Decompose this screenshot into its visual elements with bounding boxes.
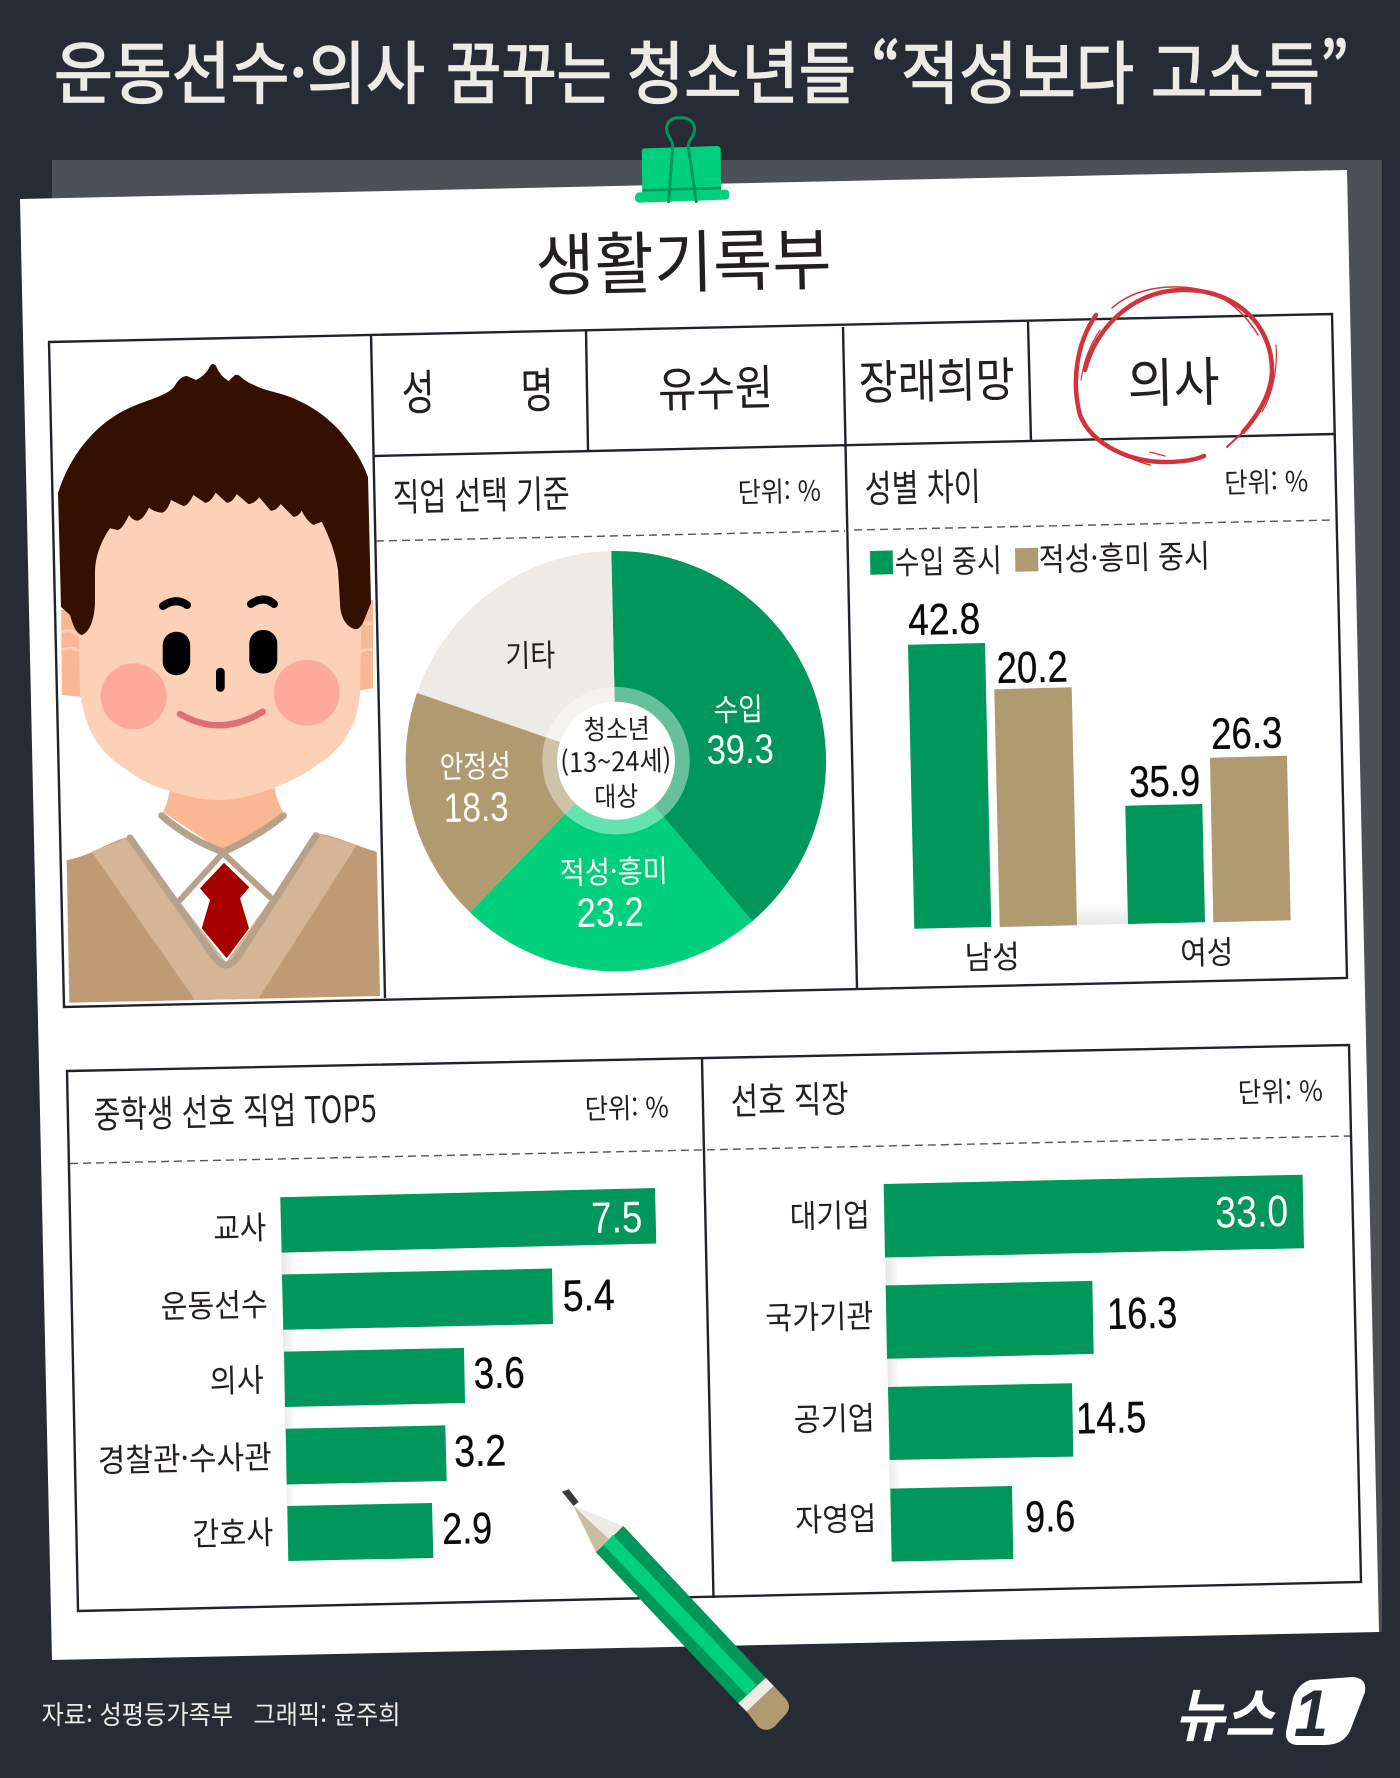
- hair: [58, 364, 371, 635]
- pie label: stability: 안정성: [439, 740, 511, 787]
- title: 청소년들: [627, 19, 856, 118]
- tie: [200, 863, 249, 958]
- pie label: aptitude and interest: [559, 846, 668, 936]
- legend: 수입 중시: [894, 536, 1002, 584]
- value labels: 26.3: [1211, 708, 1283, 759]
- pie label: income: 39.3: [706, 726, 774, 773]
- value labels: 33.0: [1215, 1187, 1289, 1237]
- category labels: 운동선수: [160, 1280, 268, 1328]
- face: [79, 480, 361, 800]
- legend: [870, 531, 1210, 584]
- value labels: [908, 594, 1283, 807]
- collar: [130, 816, 316, 965]
- bar chart: [97, 1188, 656, 1561]
- pie center label: [560, 707, 672, 814]
- source and credit: 자료: 성평등가족부 그래픽: 윤주희: [42, 1695, 400, 1732]
- value labels: 7.5: [591, 1193, 643, 1243]
- eyebrows: [163, 600, 274, 606]
- name label: 성: [401, 353, 435, 424]
- value labels: 16.3: [1107, 1288, 1178, 1339]
- future hope label: 장래희망: [858, 341, 1015, 413]
- value labels: 42.8: [908, 594, 981, 645]
- panel heading: 중학생 선호 직업 TOP5: [93, 1079, 377, 1139]
- upper record table: [49, 314, 1347, 1007]
- value labels: 3.2: [454, 1426, 507, 1476]
- value labels: [1025, 1187, 1289, 1542]
- pie center label: 대상: [594, 775, 639, 814]
- panel heading: 선호 직장: [730, 1069, 849, 1125]
- bar chart: [765, 1175, 1304, 1562]
- category labels: 교사: [213, 1203, 267, 1250]
- logo: News1: 1: [1294, 1676, 1328, 1750]
- name label: 명: [520, 351, 554, 422]
- value labels: 2.9: [442, 1504, 493, 1554]
- value labels: 5.4: [562, 1271, 615, 1321]
- value labels: 14.5: [1076, 1393, 1147, 1443]
- unit label: 단위: %: [584, 1086, 669, 1128]
- shirt: [130, 810, 316, 962]
- lower table: [67, 1045, 1361, 1611]
- pie label: aptitude and interest: 적성·흥미: [559, 846, 668, 893]
- pie center label: 청소년: [583, 707, 650, 747]
- title: [54, 19, 1349, 118]
- category labels: 자영업: [795, 1494, 877, 1541]
- panel heading: 성별 차이: [864, 456, 981, 513]
- category labels: 공기업: [793, 1393, 875, 1441]
- pie chart: [406, 551, 826, 971]
- mouth: [180, 712, 263, 725]
- ear highlights: [62, 622, 373, 652]
- neck: [163, 785, 284, 852]
- pie label: income: [706, 684, 774, 773]
- category labels: 간호사: [192, 1508, 274, 1555]
- pie label: income: 수입: [713, 684, 763, 730]
- panel: preferred workplace: [730, 1069, 1323, 1562]
- unit label: 단위: %: [1237, 1070, 1323, 1111]
- panel heading: 직업 선택 기준: [392, 463, 570, 522]
- category labels: [964, 927, 1234, 979]
- value labels: 35.9: [1129, 756, 1201, 807]
- value labels: 9.6: [1025, 1492, 1076, 1542]
- title: “적성보다: [871, 19, 1134, 118]
- category labels: [97, 1203, 274, 1555]
- value labels: 3.6: [473, 1348, 525, 1398]
- pie label: aptitude and interest: 23.2: [576, 889, 644, 936]
- pie center label: (13~24세): [560, 739, 672, 780]
- sweater: [67, 833, 380, 1003]
- student portrait: [58, 364, 380, 1003]
- logo: News1: 뉴스: [1175, 1669, 1276, 1753]
- sweater V band: [92, 833, 357, 1000]
- value labels: 20.2: [996, 642, 1068, 693]
- panel: preferred jobs top 5: [93, 1079, 669, 1561]
- panel: career criteria: [392, 463, 826, 971]
- red hand-drawn circle: [1076, 287, 1276, 465]
- logo: News1: [1175, 1669, 1365, 1753]
- unit label: 단위: %: [1224, 460, 1309, 502]
- unit label: 단위: %: [737, 470, 821, 511]
- name label: [401, 351, 554, 424]
- category labels: 국가기관: [765, 1291, 874, 1339]
- pie label: stability: [439, 740, 511, 831]
- category labels: 여성: [1180, 927, 1234, 974]
- ears: [61, 600, 373, 697]
- bar chart: [908, 594, 1291, 979]
- category labels: 남성: [964, 932, 1020, 979]
- heading: school record: 생활기록부: [534, 204, 832, 310]
- legend: 적성·흥미 중시: [1038, 531, 1210, 581]
- cheeks: [101, 660, 340, 729]
- future hope value: 의사: [1127, 340, 1220, 418]
- pie label: stability: 18.3: [443, 784, 509, 831]
- title: 고소득”: [1151, 19, 1349, 118]
- category labels: [765, 1190, 877, 1541]
- category labels: 경찰관·수사관: [97, 1432, 272, 1482]
- name value: 유수원: [657, 348, 774, 421]
- panel: gender difference: [864, 456, 1309, 979]
- value labels: [442, 1193, 643, 1554]
- icon: binder clip: [635, 118, 729, 203]
- icon: pencil: [562, 1489, 789, 1730]
- category labels: 의사: [209, 1355, 264, 1402]
- eyes: [163, 630, 277, 692]
- title: 운동선수·의사: [54, 19, 425, 118]
- pie label: other: 기타: [505, 630, 556, 676]
- title: 꿈꾸는: [446, 19, 612, 118]
- category labels: 대기업: [789, 1190, 870, 1238]
- paper shadow: [52, 160, 1382, 1632]
